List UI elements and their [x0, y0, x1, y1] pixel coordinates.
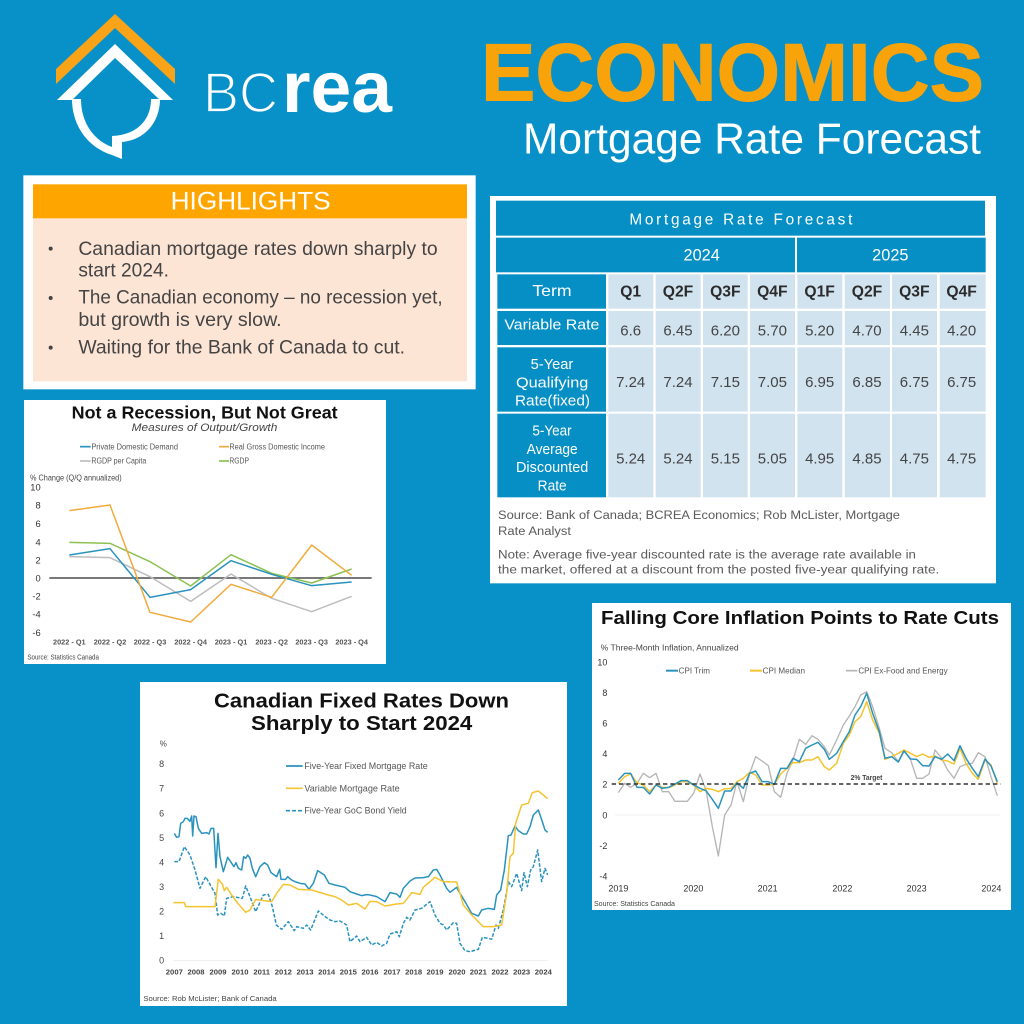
- y axis labels: [159, 739, 167, 966]
- x axis labels: 2021: [758, 884, 778, 894]
- logo wordmark: [203, 48, 393, 128]
- y axis labels: 6: [35, 519, 41, 529]
- table data cells: 6.20: [711, 322, 740, 339]
- y axis labels: 4: [602, 749, 607, 759]
- source: Source: Rob McLister; Bank of Canada: [143, 994, 277, 1003]
- table data cells: 7.15: [711, 374, 740, 391]
- y axis labels: 0: [35, 573, 41, 583]
- x axis labels: 2012: [275, 967, 292, 976]
- y axis labels: -4: [32, 610, 41, 620]
- y axis labels: 10: [597, 657, 607, 667]
- panel: not a recession chart: [24, 400, 386, 664]
- x axis labels: 2023 - Q3: [295, 637, 328, 646]
- x axis labels: 2008: [187, 967, 205, 976]
- table data cells: 7.05: [758, 374, 787, 391]
- x axis labels: 2014: [318, 967, 336, 976]
- table data cells: 6.45: [663, 322, 693, 339]
- x axis labels: 2013: [296, 967, 314, 976]
- table data cells: Q4F: [946, 284, 977, 301]
- term column: 5-Year: [532, 423, 572, 440]
- term column: Discounted: [516, 459, 588, 476]
- x axis labels: 2016: [361, 967, 379, 976]
- x axis labels: 2024: [535, 967, 553, 976]
- table data cells: 4.75: [947, 450, 976, 467]
- table data cells: 7.24: [663, 374, 693, 391]
- table data cells: Q1F: [804, 284, 835, 301]
- y axis labels: -2: [599, 841, 607, 851]
- y axis labels: [30, 483, 41, 638]
- table data cells: 4.95: [805, 450, 834, 467]
- table data cells: 5.70: [758, 322, 787, 339]
- year headers: 2024: [684, 246, 720, 264]
- table data cells: Q2F: [852, 284, 882, 301]
- table data cells: 7.24: [616, 374, 645, 391]
- logo wordmark: BC: [203, 61, 278, 125]
- x axis labels: [53, 637, 369, 646]
- highlights bullet list: [49, 239, 443, 358]
- legend: CPI Median: [763, 666, 805, 676]
- x axis labels: 2022: [491, 967, 509, 976]
- panel: highlights: [23, 175, 476, 389]
- year headers: [496, 238, 986, 272]
- year headers: 2025: [872, 246, 908, 264]
- table data cells: 6.75: [947, 374, 976, 391]
- y axis labels: 4: [159, 857, 164, 867]
- legend: RGDP: [229, 457, 249, 466]
- table data cells: 4.20: [947, 322, 976, 339]
- x axis labels: [608, 884, 1001, 894]
- term column: Variable Rate: [504, 316, 599, 333]
- y axis labels: 0: [159, 956, 164, 966]
- y axis labels: -4: [599, 872, 607, 882]
- x axis labels: 2020: [448, 967, 466, 976]
- logo wordmark: rea: [282, 48, 393, 128]
- table data cells: Q1: [620, 284, 641, 301]
- panel: falling core inflation chart: [592, 603, 1011, 910]
- x axis labels: 2023: [907, 884, 927, 894]
- y axis labels: [597, 657, 607, 882]
- highlights heading: HIGHLIGHTS: [171, 188, 331, 216]
- x axis labels: 2020: [683, 884, 703, 894]
- table data cells: 4.70: [852, 322, 882, 339]
- term column: Qualifying: [516, 374, 588, 391]
- table data cells: Q3F: [899, 284, 930, 301]
- x axis labels: 2007: [166, 967, 183, 976]
- x axis labels: 2022 - Q3: [134, 637, 166, 646]
- x axis labels: 2021: [470, 967, 488, 976]
- table data cells: 4.75: [900, 450, 929, 467]
- chart title: Canadian Fixed Rates Down: [214, 690, 509, 712]
- y axis labels: 5: [159, 833, 164, 843]
- x axis labels: [166, 967, 553, 976]
- table data cells: 4.85: [852, 450, 882, 467]
- y axis labels: 0: [602, 810, 607, 820]
- y axis labels: 8: [159, 759, 164, 769]
- table source and note: Rate Analyst: [498, 524, 572, 538]
- chart title: Sharply to Start 2024: [251, 713, 472, 735]
- x axis labels: 2022 - Q4: [174, 637, 208, 646]
- legend: Five-Year GoC Bond Yield: [304, 806, 407, 816]
- term column: Term: [532, 283, 572, 300]
- term column: [497, 274, 606, 497]
- highlights heading: [33, 184, 467, 218]
- legend: CPI Ex-Food and Energy: [858, 666, 948, 676]
- table source and note: Note: Average five-year discounted rate is the average rate available in: [498, 547, 916, 561]
- x axis labels: 2019: [608, 884, 628, 894]
- legend: Variable Mortgage Rate: [304, 783, 400, 793]
- x axis labels: 2023 - Q4: [335, 637, 369, 646]
- y axis labels: 4: [35, 537, 41, 547]
- x axis labels: 2011: [253, 967, 271, 976]
- subtitle: Mortgage Rate Forecast: Mortgage Rate Forecast: [523, 114, 981, 164]
- y axis labels: 6: [159, 808, 164, 818]
- y axis labels: 10: [30, 483, 41, 493]
- x axis labels: 2023 - Q1: [215, 637, 247, 646]
- legend: Real Gross Domestic Income: [229, 442, 325, 451]
- table data cells: 5.15: [711, 450, 740, 467]
- legend: Five-Year Fixed Mortgage Rate: [304, 761, 428, 771]
- x axis labels: 2022 - Q2: [94, 637, 126, 646]
- y axis labels: 2: [159, 906, 164, 916]
- table data cells: Q3F: [710, 284, 741, 301]
- y axis labels: 7: [159, 784, 164, 794]
- icon: orange roof: [56, 14, 175, 84]
- x axis labels: 2023 - Q2: [255, 637, 288, 646]
- y axis labels: 1: [159, 931, 164, 941]
- y axis labels: 8: [35, 501, 41, 511]
- table data cells: 6.75: [900, 374, 929, 391]
- y axis labels: 8: [602, 688, 607, 698]
- term column: Average: [527, 441, 578, 458]
- term column: 5-Year: [531, 356, 573, 373]
- line chart: [49, 505, 372, 622]
- y axis labels: 3: [159, 882, 164, 892]
- logo: BCREA: [56, 14, 393, 159]
- line chart: [173, 791, 548, 960]
- legend: [666, 666, 948, 676]
- icon: white roof and speech bubble: [57, 44, 173, 159]
- y axis labels: 2: [35, 555, 41, 565]
- table data cells: 6.95: [805, 374, 834, 391]
- table data cells: Q2F: [663, 284, 693, 301]
- highlights bullet list: Waiting for the Bank of Canada to cut.: [78, 337, 405, 358]
- table data cells: 5.05: [758, 450, 787, 467]
- table data cells: 5.24: [663, 450, 693, 467]
- y axis title: % Change (Q/Q annualized): [30, 473, 122, 482]
- legend: Private Domestic Demand: [91, 442, 178, 451]
- x axis labels: 2019: [426, 967, 444, 976]
- legend: CPI Trim: [679, 666, 710, 676]
- y axis labels: 6: [602, 718, 607, 728]
- chart title: Not a Recession, But Not Great: [72, 402, 338, 422]
- highlights bullet list: The Canadian economy – no recession yet,: [78, 288, 443, 309]
- panel: mortgage rate forecast table: [490, 196, 996, 583]
- chart subtitle: Measures of Output/Growth: [132, 422, 277, 434]
- y axis labels: 2: [602, 780, 607, 790]
- table data cells: 5.24: [616, 450, 645, 467]
- legend: RGDP per Capita: [91, 457, 147, 466]
- table source and note: Source: Bank of Canada; BCREA Economics; Rob McLister, Mortgage: [498, 508, 900, 522]
- x axis labels: 2009: [209, 967, 227, 976]
- x axis labels: 2023: [513, 967, 530, 976]
- source: Source: Statistics Canada: [27, 652, 100, 661]
- target label: 2% Target: [851, 773, 883, 782]
- highlights bullet list: but growth is very slow.: [78, 310, 282, 331]
- y axis labels: %: [160, 739, 167, 748]
- chart title: [214, 690, 509, 735]
- y axis labels: -6: [32, 628, 41, 638]
- term column: Rate(fixed): [515, 392, 590, 409]
- table data cells: 5.20: [805, 322, 834, 339]
- x axis labels: 2022 - Q1: [53, 637, 86, 646]
- legend: [80, 442, 325, 466]
- table title bar: [496, 201, 985, 236]
- highlights bullet list: start 2024.: [78, 261, 169, 282]
- table data cells: Q4F: [757, 284, 788, 301]
- chart title: Falling Core Inflation Points to Rate Cuts: [601, 607, 999, 628]
- term column: Rate: [538, 477, 567, 494]
- title: Economics: ECONOMICS: [481, 28, 984, 118]
- source: Source: Statistics Canada: [594, 899, 676, 908]
- y axis labels: -2: [32, 592, 41, 602]
- table data cells: [608, 274, 986, 497]
- x axis labels: 2024: [981, 884, 1001, 894]
- table title bar: Mortgage Rate Forecast: [629, 211, 853, 228]
- x axis labels: 2010: [231, 967, 249, 976]
- highlights bullet list: Canadian mortgage rates down sharply to: [78, 239, 438, 260]
- x axis labels: 2015: [340, 967, 358, 976]
- legend: [286, 761, 428, 816]
- table data cells: 4.45: [900, 322, 929, 339]
- line chart: [612, 692, 1001, 856]
- x axis labels: 2017: [383, 967, 401, 976]
- y axis title: % Three-Month Inflation, Annualized: [601, 643, 739, 653]
- x axis labels: 2022: [832, 884, 852, 894]
- panel: canadian fixed rates chart: [140, 682, 567, 1006]
- x axis labels: 2018: [405, 967, 423, 976]
- table source and note: the market, offered at a discount from the posted five-year qualifying rate.: [498, 562, 939, 576]
- table source and note: [498, 508, 939, 576]
- table data cells: 6.6: [620, 322, 641, 339]
- table data cells: 6.85: [852, 374, 882, 391]
